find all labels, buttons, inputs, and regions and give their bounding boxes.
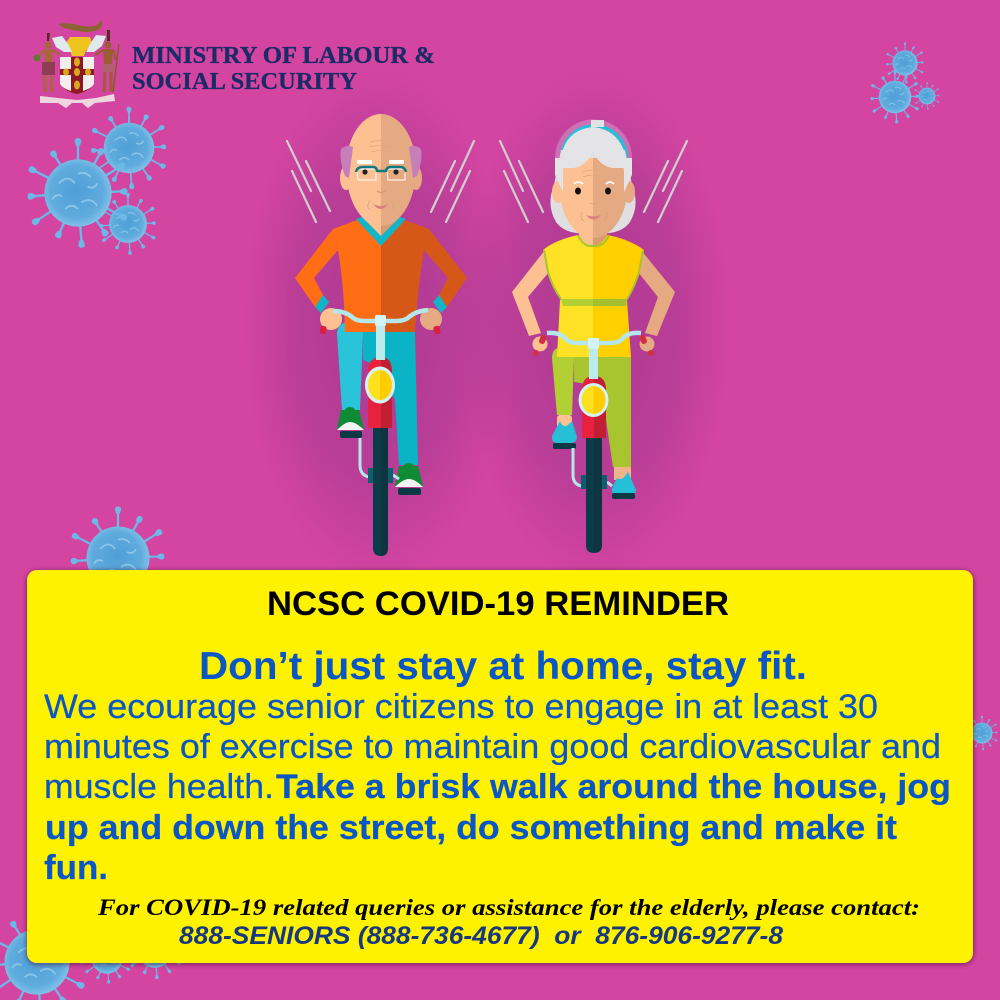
body text: muscle health. [44, 768, 274, 806]
headlight [365, 366, 395, 404]
neckline [578, 235, 609, 246]
panel background [27, 570, 973, 963]
ministry name: MINISTRY OF LABOUR & [132, 43, 435, 69]
handlebar [333, 310, 428, 321]
body text [44, 688, 951, 887]
transparent hood [555, 120, 632, 158]
ministry name [132, 43, 435, 95]
shadow behind man [243, 65, 513, 585]
headlight [578, 383, 608, 417]
face [560, 158, 593, 238]
mantling [64, 37, 93, 56]
eyebrows [357, 160, 372, 164]
body text: minutes of exercise to maintain good cardiovascular and [44, 728, 941, 766]
ears [552, 181, 564, 203]
hair [340, 146, 353, 178]
virus behind panel right [966, 716, 998, 750]
body text: Take a brisk walk around the house, jog [276, 768, 951, 806]
top hair [555, 127, 632, 192]
virus cluster top right [870, 42, 940, 124]
neck [362, 218, 381, 240]
handlebar [547, 333, 641, 343]
belt [561, 299, 593, 306]
subheading: Don’t just stay at home, stay fit. [199, 645, 807, 688]
left shoe [552, 421, 577, 443]
fender [582, 376, 594, 438]
wheel [586, 438, 594, 553]
crank [368, 468, 393, 483]
wrinkles [583, 170, 606, 177]
shield [60, 57, 94, 94]
crank arm [573, 448, 612, 486]
contact numbers: 888-SENIORS (888-736-4677) or 876-906-9277-8 [179, 922, 783, 950]
virus behind panel top [70, 506, 165, 610]
headband [562, 126, 626, 158]
back hair [550, 150, 636, 234]
motion lines: man [287, 141, 474, 222]
stem [589, 345, 598, 379]
virus cluster top left [27, 107, 167, 255]
man cyclist [295, 114, 467, 556]
raised left leg [337, 322, 363, 410]
panel heading: NCSC COVID-19 REMINDER [267, 585, 729, 623]
arms [295, 229, 338, 307]
left supporter [34, 33, 60, 92]
hands [320, 308, 342, 330]
panel: reminder [27, 570, 973, 963]
dress top [543, 235, 593, 300]
crocodile crest [58, 20, 102, 32]
torso [333, 220, 381, 332]
woman cyclist [512, 120, 675, 553]
right supporter [95, 30, 119, 92]
wheel [373, 428, 381, 556]
right leg [574, 357, 631, 467]
mouth [586, 215, 601, 220]
glasses [356, 167, 406, 180]
brows [574, 182, 614, 184]
hands [532, 336, 548, 352]
motto ribbon [40, 94, 115, 108]
cuffs [315, 295, 329, 313]
motion lines: woman [500, 141, 687, 222]
left shoe [337, 407, 364, 429]
ministry name: SOCIAL SECURITY [132, 69, 357, 95]
armhole trim [544, 250, 643, 299]
raised left leg [552, 347, 574, 415]
body text: We ecourage senior citizens to engage in at least 30 [44, 688, 878, 726]
contact note: For COVID-19 related queries or assistance for the elderly, please contact: [97, 895, 920, 920]
neck [579, 230, 593, 246]
eyes [575, 188, 581, 194]
body text: up and down the street, do something and make it [45, 809, 897, 847]
ears [340, 166, 352, 190]
crank [581, 475, 607, 489]
body text: fun. [44, 849, 108, 887]
collar [356, 217, 406, 246]
right ankle [614, 467, 631, 480]
stem [376, 322, 385, 360]
grips [319, 325, 327, 335]
ministry logo: coat of arms [34, 20, 119, 108]
virus cluster bottom left [0, 909, 182, 1000]
left ankle [557, 415, 572, 430]
shadow behind woman [461, 65, 731, 585]
arms [512, 250, 549, 336]
forehead wrinkles [369, 140, 393, 152]
grips [538, 334, 547, 345]
right shoe [395, 463, 423, 486]
fender [368, 357, 381, 428]
crank arm [360, 438, 399, 479]
right leg [363, 332, 418, 465]
nose and mouth [377, 191, 385, 192]
right shoe [612, 472, 636, 494]
head [346, 114, 381, 226]
skirt [557, 300, 593, 357]
